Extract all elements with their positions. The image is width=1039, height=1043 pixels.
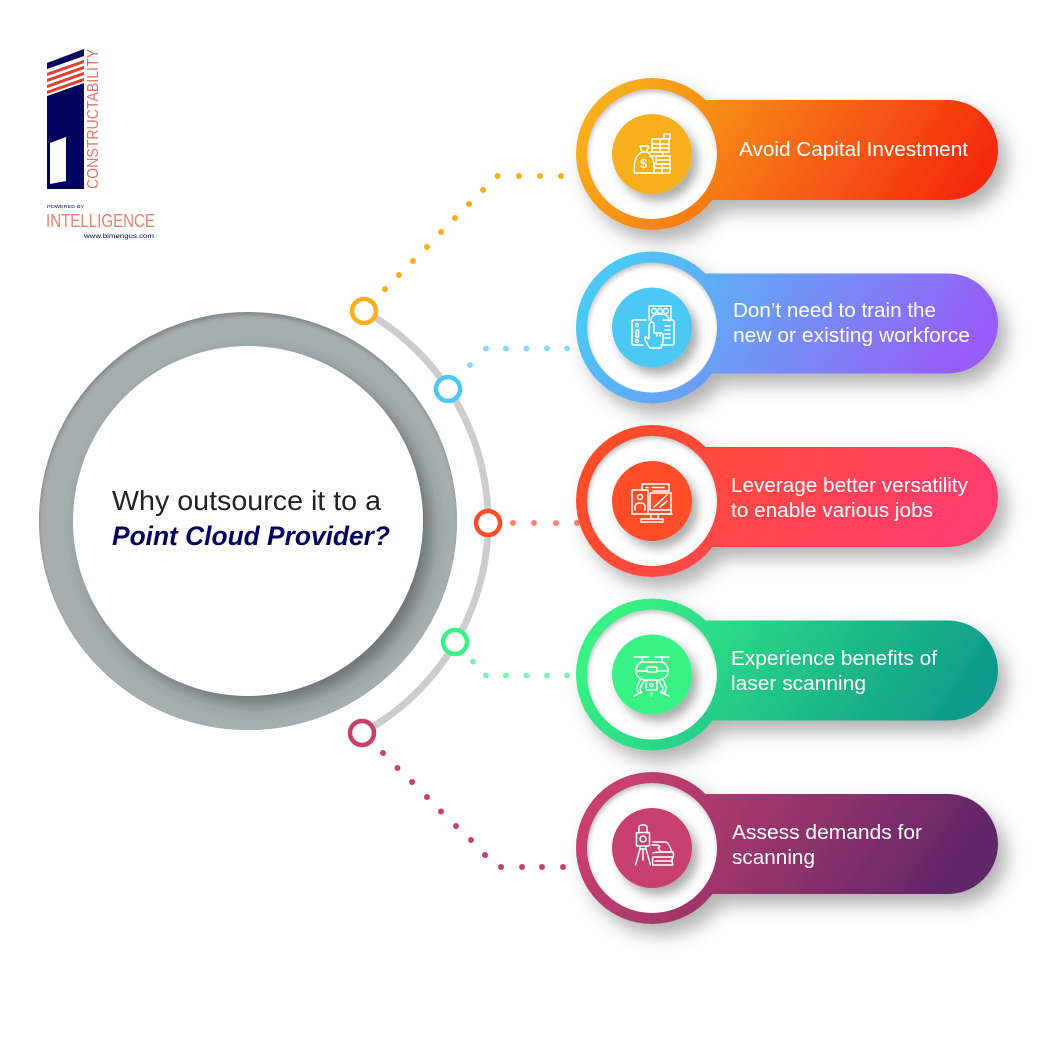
label: Assess demands for — [732, 821, 922, 844]
connector arc — [362, 311, 488, 733]
logo building mark — [47, 49, 84, 189]
pill with ring — [576, 598, 998, 750]
label — [733, 299, 970, 347]
dotted connector: red — [510, 520, 580, 526]
pill with ring — [576, 425, 998, 577]
panel: laser scanning — [576, 598, 998, 750]
icon: monitor with windows — [632, 484, 672, 522]
label: new or existing workforce — [733, 324, 970, 347]
label — [731, 647, 937, 695]
pill with ring — [576, 772, 998, 924]
icon: tablet with pointing hand — [632, 306, 674, 348]
label: to enable various jobs — [731, 499, 933, 522]
logo powered by: POWERED BY — [47, 204, 84, 209]
timeline nodes — [350, 299, 500, 745]
label — [731, 474, 969, 522]
central heading: Why outsource it to a — [112, 485, 381, 516]
panel: training — [576, 252, 998, 404]
pill with ring — [576, 78, 998, 230]
logo vertical wordmark: CONSTRUCTABILITY — [85, 49, 102, 189]
label: scanning — [732, 846, 815, 869]
panel: avoid capital investment — [576, 78, 998, 230]
dotted connector: yellow — [382, 173, 564, 292]
icon: drone with scanner — [634, 657, 669, 696]
label: Leverage better versatility — [731, 474, 969, 497]
central ring — [39, 312, 459, 735]
logo intelligence wordmark: INTELLIGENCE — [46, 211, 155, 231]
pill with ring — [576, 252, 998, 404]
icon: money bag and cash stacks: $ — [640, 156, 648, 171]
label — [732, 821, 922, 869]
label: Don’t need to train the — [733, 299, 936, 322]
panel: assess demands — [576, 772, 998, 924]
central heading: Point Cloud Provider? — [112, 521, 390, 551]
central heading — [112, 485, 390, 551]
panel: versatility — [576, 425, 998, 577]
label: Experience benefits of — [731, 647, 937, 670]
label: Avoid Capital Investment — [739, 138, 968, 161]
icon: money bag and cash stacks — [634, 134, 670, 173]
logo website: www.bimengus.com — [83, 234, 154, 240]
label: laser scanning — [731, 672, 866, 695]
logo: Constructability Intelligence — [46, 49, 155, 240]
icon: total station and books — [636, 825, 674, 865]
dotted connector: green — [470, 658, 570, 678]
dotted connector: blue — [467, 346, 570, 368]
dotted connector: magenta — [380, 750, 566, 870]
